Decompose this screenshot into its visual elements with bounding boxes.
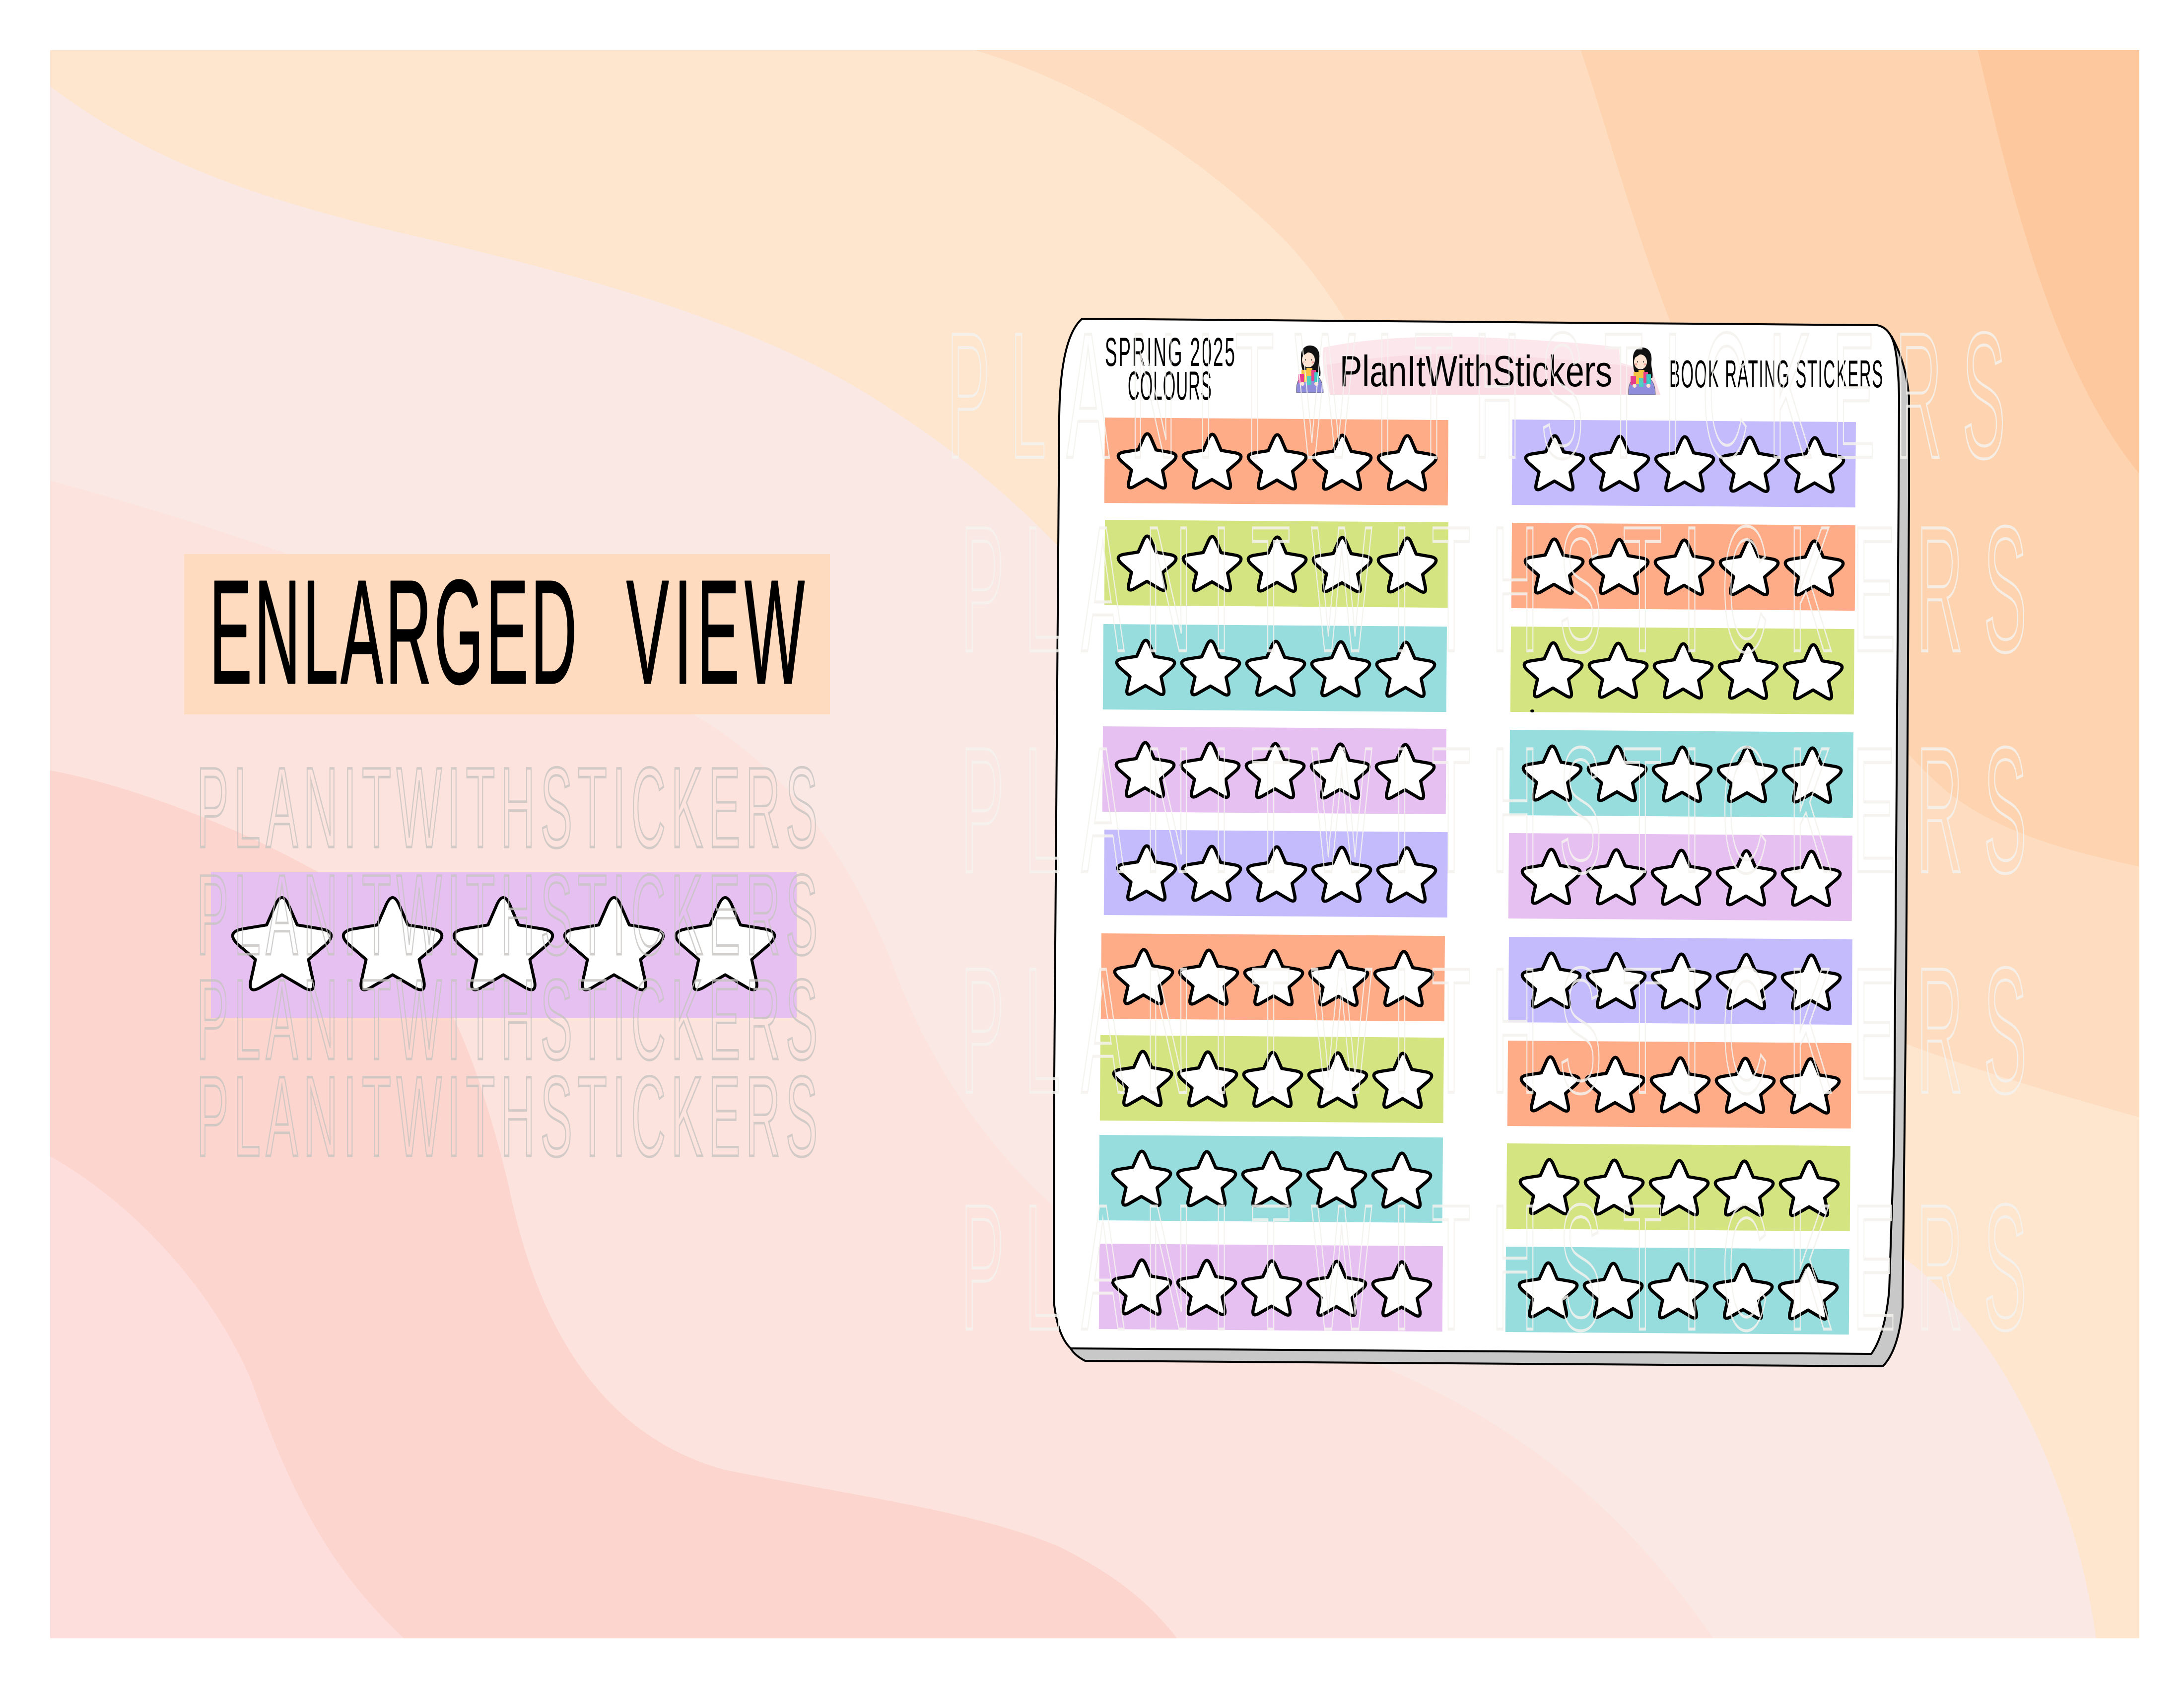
left strip 2 green xyxy=(1104,520,1448,608)
left strip 9 lilac xyxy=(1099,1244,1443,1332)
left strip 3 teal xyxy=(1103,624,1447,712)
left strip 8 teal xyxy=(1099,1135,1443,1223)
watermark: sticker sheet: PLANITWITHSTICKERS xyxy=(947,296,2005,495)
right strip 3 green xyxy=(1510,627,1854,714)
watermark: left column: PLANITWITHSTICKERS xyxy=(197,956,818,1084)
right strip 8 green xyxy=(1506,1143,1850,1231)
watermark: sticker sheet: PLANITWITHSTICKERS xyxy=(961,710,2027,910)
right strip 4 teal xyxy=(1509,730,1853,818)
stray ink dot xyxy=(1530,709,1534,712)
right strip 2 orange xyxy=(1511,523,1855,611)
left strip 1 orange xyxy=(1104,418,1448,505)
icon: girl left xyxy=(1297,346,1323,393)
watermark: left column xyxy=(197,744,818,1181)
header pink brush xyxy=(1323,337,1660,395)
left strip 4 lilac xyxy=(1102,726,1446,814)
sticker sheet xyxy=(1054,319,1909,1366)
left strip 6 orange xyxy=(1101,933,1445,1021)
right strip 6 purple xyxy=(1508,937,1852,1025)
heading: enlarged view: ENLARGED xyxy=(209,549,577,715)
header: product title: BOOK RATING STICKERS xyxy=(1669,352,1883,396)
enlarged sticker strip with five stars xyxy=(211,872,797,1018)
right strip 5 lilac xyxy=(1508,833,1852,921)
right strip 1 purple xyxy=(1512,420,1856,507)
watermark: left column: PLANITWITHSTICKERS xyxy=(197,744,818,872)
heading: enlarged view xyxy=(184,549,830,715)
right strip 7 orange xyxy=(1507,1041,1851,1128)
watermark: sticker sheet: PLANITWITHSTICKERS xyxy=(961,931,2027,1130)
watermark: sticker sheet: PLANITWITHSTICKERS xyxy=(961,1168,2027,1367)
header: season label xyxy=(1105,329,1235,409)
heading: enlarged view: VIEW xyxy=(626,549,805,715)
left strip 5 purple xyxy=(1104,830,1448,917)
watermark: sticker sheet xyxy=(947,296,2027,1367)
header: brand name: PlanItWithStickers xyxy=(1340,347,1612,396)
icon: girl right xyxy=(1629,348,1655,395)
watermark: left column: PLANITWITHSTICKERS xyxy=(197,1053,818,1181)
watermark: left column: PLANITWITHSTICKERS xyxy=(197,851,818,979)
header: season label: SPRING 2025 xyxy=(1105,329,1235,375)
watermark: sticker sheet: PLANITWITHSTICKERS xyxy=(961,490,2027,689)
sheet paper xyxy=(1054,319,1899,1354)
sheet shadow xyxy=(1071,337,1909,1366)
header: season label: COLOURS xyxy=(1128,363,1212,409)
left strip 7 green xyxy=(1100,1035,1444,1123)
right strip 9 teal xyxy=(1505,1247,1849,1335)
